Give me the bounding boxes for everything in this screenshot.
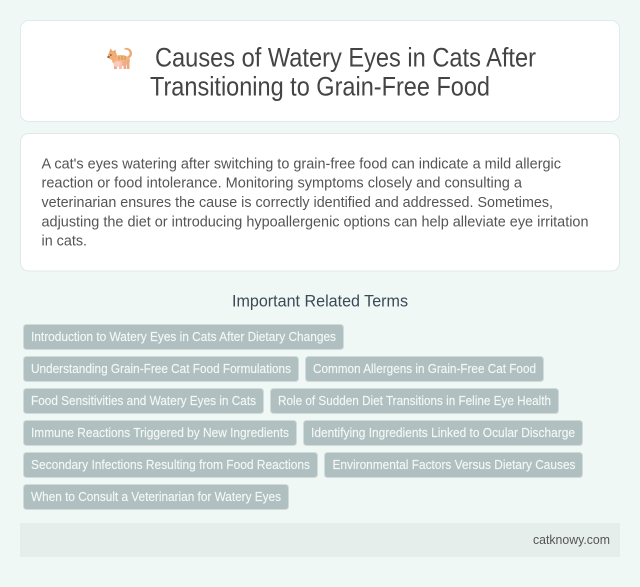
tag: Role of Sudden Diet Transitions in Feline Eye Health — [278, 393, 551, 408]
summary text — [42, 155, 588, 250]
tag — [306, 356, 544, 382]
tag: Understanding Grain-Free Cat Food Formulations — [31, 361, 291, 376]
tag: Environmental Factors Versus Dietary Causes — [332, 457, 576, 472]
tag: Food Sensitivities and Watery Eyes in Cats — [31, 393, 256, 408]
tag: Identifying Ingredients Linked to Ocular Discharge — [311, 425, 575, 440]
tag: Immune Reactions Triggered by New Ingredients — [31, 425, 289, 440]
title text: Transitioning to Grain-Free Food — [150, 72, 490, 102]
tag: Common Allergens in Grain-Free Cat Food — [313, 361, 536, 376]
tag — [324, 452, 582, 478]
panel: summary — [20, 134, 620, 271]
tag — [304, 420, 582, 446]
icon: cat — [107, 48, 132, 69]
summary text: reaction or food intolerance. Monitoring symptoms closely and consulting a — [42, 175, 523, 192]
summary text: veterinarian ensures the cause is correctly identified and addressed. Sometimes, — [42, 194, 553, 211]
title text — [150, 43, 536, 102]
title text: Causes of Watery Eyes in Cats After — [155, 43, 536, 73]
tag — [24, 420, 296, 446]
tag — [270, 388, 558, 414]
panel: title card — [20, 20, 620, 122]
tag — [24, 484, 288, 510]
related terms tags — [24, 324, 582, 510]
tag: When to Consult a Veterinarian for Watery Eyes — [31, 489, 281, 504]
tag — [24, 452, 318, 478]
tag — [24, 356, 298, 382]
footer source: catknowy.com — [533, 532, 610, 547]
heading: important related terms: Important Related Terms — [232, 292, 408, 311]
summary text: adjusting the diet or introducing hypoallergenic options can help alleviate eye irritation — [42, 213, 588, 230]
tag: Secondary Infections Resulting from Food Reactions — [31, 457, 310, 472]
tag — [24, 324, 344, 350]
footer — [20, 523, 620, 557]
tag: Introduction to Watery Eyes in Cats After Dietary Changes — [31, 329, 336, 344]
tag — [24, 388, 264, 414]
summary text: A cat's eyes watering after switching to grain-free food can indicate a mild allergic — [42, 155, 561, 172]
summary text: in cats. — [42, 233, 87, 250]
